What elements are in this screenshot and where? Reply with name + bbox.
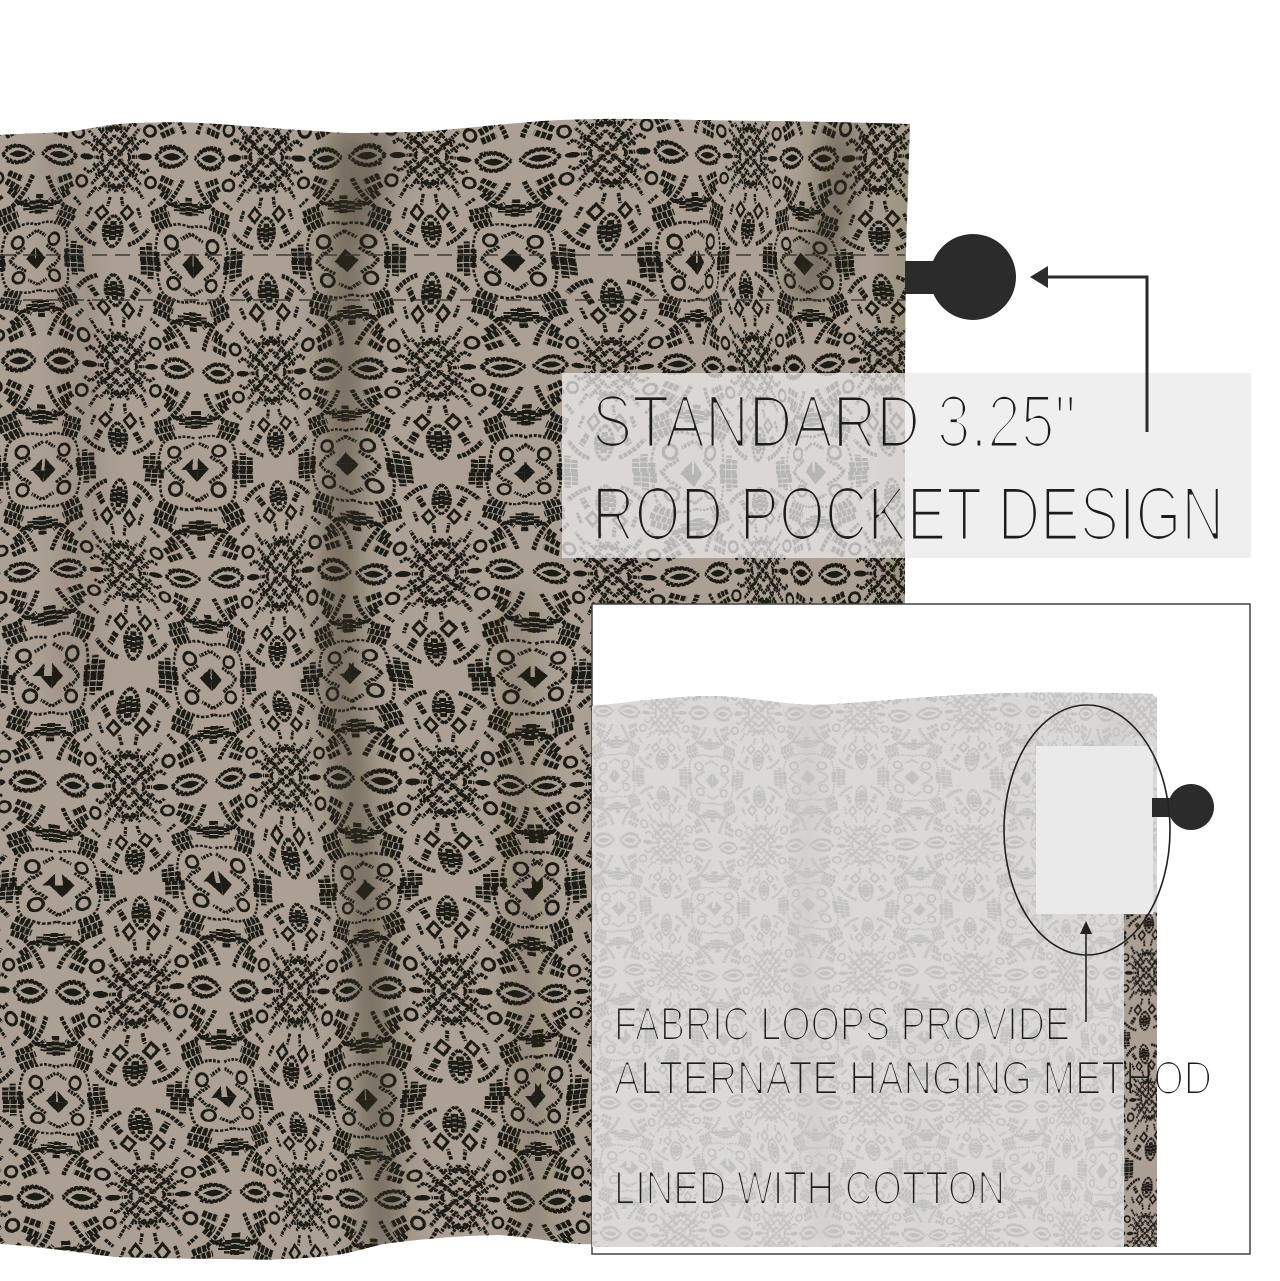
icon: curtain rod with round finial <box>905 234 1016 320</box>
inset curtain fabric <box>592 692 1210 1247</box>
caption: lined with cotton: LINED WITH COTTON <box>614 1161 1005 1214</box>
heading: rod pocket design <box>592 380 1224 557</box>
highlight ellipse around loop <box>1004 705 1170 955</box>
callout band behind rod pocket label <box>562 373 1251 558</box>
heading: rod pocket design: STANDARD 3.25" <box>592 380 1076 463</box>
caption: fabric loops <box>614 997 1212 1104</box>
caption: fabric loops: FABRIC LOOPS PROVIDE <box>614 997 1070 1050</box>
arrow: from label to rod <box>1030 266 1147 432</box>
curtain fabric photo <box>0 50 968 1274</box>
icon: small curtain rod <box>1152 784 1214 830</box>
fabric loop cut-away <box>1036 746 1153 914</box>
panel: inset alternate hanging method <box>591 603 1251 1255</box>
arrow: from caption to fabric loop <box>1080 921 1092 1022</box>
